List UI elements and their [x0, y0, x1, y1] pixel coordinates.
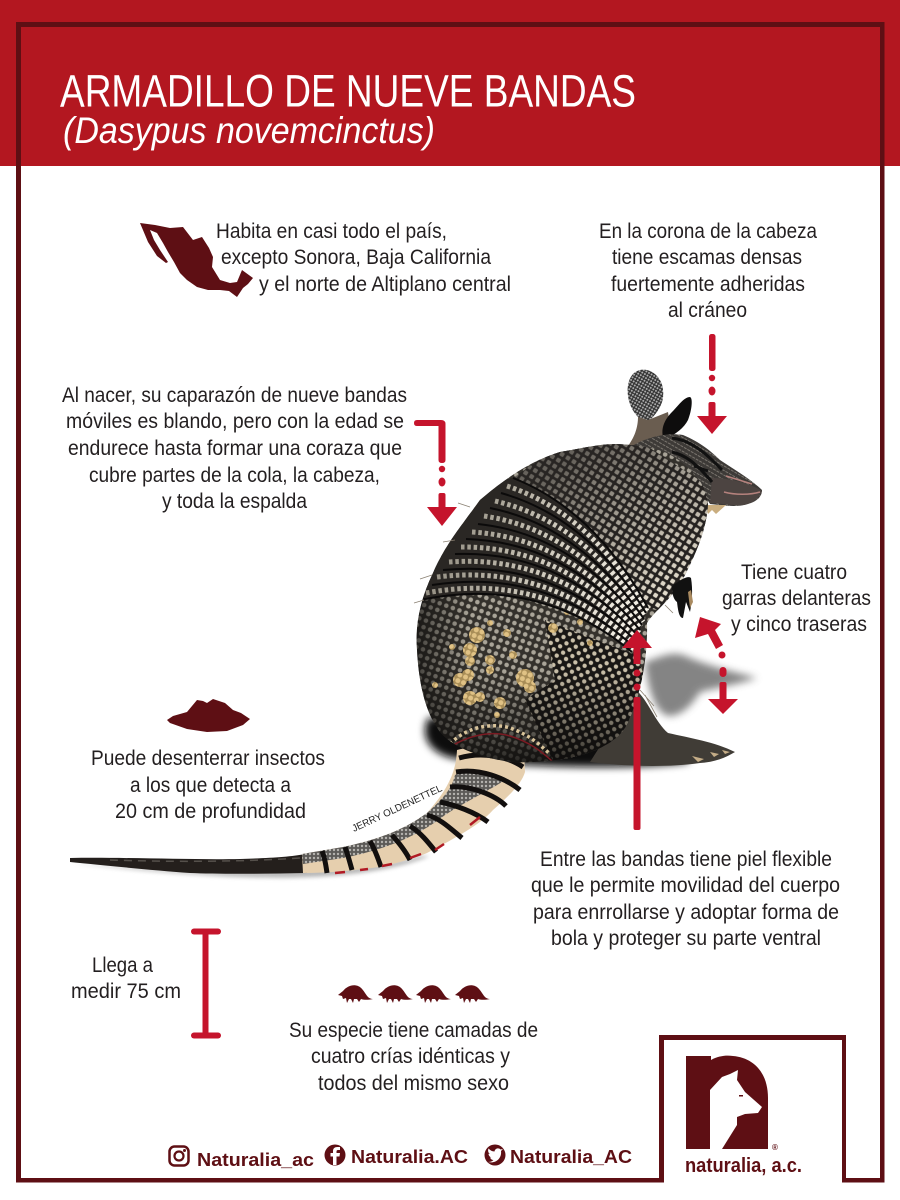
text: distribution: y el norte de Altiplano central	[259, 273, 511, 296]
text: litters: Su especie tiene camadas de	[289, 1019, 538, 1042]
text: claws: garras delanteras	[722, 587, 871, 610]
ear back	[628, 370, 663, 422]
ear front	[662, 397, 692, 440]
text: length: Llega a	[92, 954, 153, 977]
icon: facebook	[324, 1144, 346, 1166]
text: head scales: fuertemente adheridas	[611, 273, 805, 296]
text: shell at birth: cubre partes de la cola, la cabeza,	[89, 464, 380, 487]
icon: instagram	[170, 1146, 188, 1166]
text: head scales	[599, 220, 817, 322]
icon: twitter	[484, 1144, 506, 1166]
header band	[0, 0, 900, 166]
neck tuft	[706, 505, 726, 514]
text: insects: Puede desenterrar insectos	[91, 747, 325, 770]
registered mark: ®	[772, 1143, 778, 1152]
text: insects: a los que detecta a	[130, 774, 291, 797]
text: litters	[289, 1019, 538, 1095]
nine bands lines	[420, 478, 648, 652]
social: instagram	[170, 1146, 314, 1170]
icons: four baby armadillos	[338, 985, 490, 1003]
text: distribution	[216, 220, 511, 296]
tail cream rings	[302, 746, 525, 873]
text: shell at birth: y toda la espalda	[162, 490, 307, 513]
rear flank light scutes	[525, 620, 650, 765]
band base	[405, 478, 648, 652]
text: claws	[722, 561, 871, 636]
text: shell at birth: Al nacer, su caparazón de nueve bandas	[62, 384, 407, 407]
snout	[710, 478, 762, 505]
text: head scales: al cráneo	[668, 299, 747, 322]
text: head scales: En la corona de la cabeza	[599, 220, 817, 243]
snout pink	[724, 476, 760, 494]
text: flexible skin: Entre las bandas tiene piel flexible	[540, 848, 832, 871]
text: shell at birth: móviles es blando, pero con la edad se	[66, 410, 404, 433]
photo credit: JERRY OLDENETTEL	[351, 783, 444, 835]
left rim shading	[416, 580, 466, 745]
logo box	[659, 1035, 846, 1182]
text: insects: 20 cm de profundidad	[115, 800, 306, 823]
text: shell at birth: endurece hasta formar una coraza que	[68, 437, 402, 460]
tail gray scutes	[302, 770, 505, 864]
neck shading	[514, 444, 708, 599]
tail red skin	[335, 817, 480, 873]
head	[630, 434, 762, 506]
text: insects	[91, 747, 325, 823]
social: facebook: Naturalia.AC	[351, 1147, 468, 1167]
icon: size bar	[191, 928, 221, 1038]
text: flexible skin: bola y proteger su parte ventral	[551, 927, 821, 950]
fox eye	[739, 1095, 743, 1096]
logo fox	[710, 1070, 762, 1149]
gold patches	[432, 609, 593, 718]
text: length: medir 75 cm	[71, 980, 181, 1003]
logo mark n	[686, 1056, 768, 1149]
nine bands scutes	[426, 486, 647, 650]
whiskers and hairs	[414, 503, 673, 717]
social: twitter	[484, 1144, 632, 1167]
social: facebook	[324, 1144, 468, 1167]
rear shield	[410, 440, 720, 770]
text: distribution: excepto Sonora, Baja California	[221, 246, 491, 269]
tail	[70, 746, 525, 878]
text: flexible skin	[531, 848, 840, 950]
front shield	[514, 444, 708, 610]
arrow: head scales	[697, 334, 727, 434]
ground shadow right	[645, 654, 757, 716]
hind toes	[692, 750, 730, 762]
text: head scales: tiene escamas densas	[612, 246, 802, 269]
text: claws: y cinco traseras	[731, 613, 867, 636]
ground shadow under body	[425, 718, 690, 767]
icon: dirt pile	[167, 699, 250, 732]
social: twitter: Naturalia_AC	[510, 1147, 632, 1167]
claw tip	[688, 590, 693, 608]
social: instagram: Naturalia_ac	[197, 1150, 314, 1170]
text: shell at birth	[62, 384, 407, 513]
tail tip	[70, 854, 307, 874]
text: litters: cuatro crías idénticas y	[311, 1045, 510, 1068]
text: claws: Tiene cuatro	[741, 561, 847, 584]
red rim	[446, 734, 552, 761]
rear bottom dark area	[422, 676, 642, 762]
logo panel	[659, 1035, 846, 1182]
title: ARMADILLO DE NUEVE BANDAS	[60, 66, 636, 116]
tail shadow	[72, 856, 430, 878]
tail speckle	[110, 858, 300, 861]
icon: map of Mexico	[140, 223, 253, 297]
arrow: flexible skin	[622, 630, 652, 830]
armadillo illustration	[70, 370, 762, 878]
front claws	[672, 577, 692, 618]
logo wordmark: naturalia, a.c.	[685, 1155, 802, 1177]
beaded rim	[450, 726, 550, 754]
text: length	[71, 954, 181, 1003]
text: distribution: Habita en casi todo el país,	[216, 220, 447, 243]
arrow: claws double	[695, 617, 738, 714]
text: litters: todos del mismo sexo	[318, 1072, 509, 1095]
body shell	[416, 444, 708, 762]
text: flexible skin: que le permite movilidad del cuerpo	[531, 874, 840, 897]
text: flexible skin: para enrrollarse y adoptar forma de	[533, 901, 839, 924]
head stripes	[672, 438, 722, 482]
ear stem	[628, 412, 672, 450]
arrow: shell to back	[414, 420, 457, 526]
scientific name: (Dasypus novemcinctus)	[63, 110, 435, 151]
hind leg	[590, 690, 735, 766]
tail black bands	[322, 755, 523, 873]
